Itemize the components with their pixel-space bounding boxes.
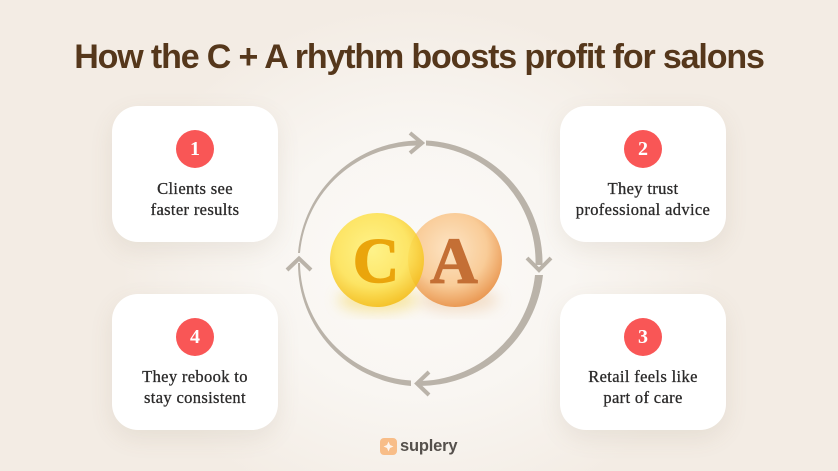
logo — [380, 437, 458, 455]
panel: step 4 — [112, 294, 278, 430]
step 3 text: part of care — [603, 388, 683, 407]
number badge 3: 3 — [638, 326, 648, 348]
number badge 2 — [624, 130, 662, 168]
step 2 text — [576, 179, 710, 219]
logo mark — [380, 438, 397, 455]
panel: step 1 — [112, 106, 278, 242]
step 4 text: They rebook to — [142, 367, 248, 386]
step 2 text: They trust — [608, 179, 678, 198]
step 1 text: Clients see — [157, 179, 233, 198]
panel: step 3 — [560, 294, 726, 430]
step 4 text: stay consistent — [144, 388, 246, 407]
number badge 2: 2 — [638, 138, 648, 160]
step 2 text: professional advice — [576, 200, 710, 219]
arrow: step 4 to step 1 — [298, 133, 422, 253]
number badge 1 — [176, 130, 214, 168]
capsule C — [330, 213, 424, 312]
capsule A: A — [430, 225, 478, 298]
logo wordmark: suplery — [400, 437, 457, 455]
title: How the C + A rhythm boosts profit for salons — [74, 38, 764, 76]
number badge 3 — [624, 318, 662, 356]
number badge 4: 4 — [190, 326, 200, 348]
arrow: step 3 to step 4 — [287, 258, 411, 386]
step 1 text: faster results — [151, 200, 239, 219]
step 4 text — [142, 367, 248, 407]
step 3 text — [588, 367, 698, 407]
arrow: step 2 to step 3 — [417, 275, 543, 395]
capsule A — [408, 213, 502, 312]
step 3 text: Retail feels like — [588, 367, 698, 386]
capsule C: C — [353, 225, 399, 296]
number badge 4 — [176, 318, 214, 356]
number badge 1: 1 — [190, 138, 200, 160]
panel: step 2 — [560, 106, 726, 242]
arrow: step 1 to step 2 — [426, 140, 551, 270]
step 1 text — [151, 179, 239, 219]
